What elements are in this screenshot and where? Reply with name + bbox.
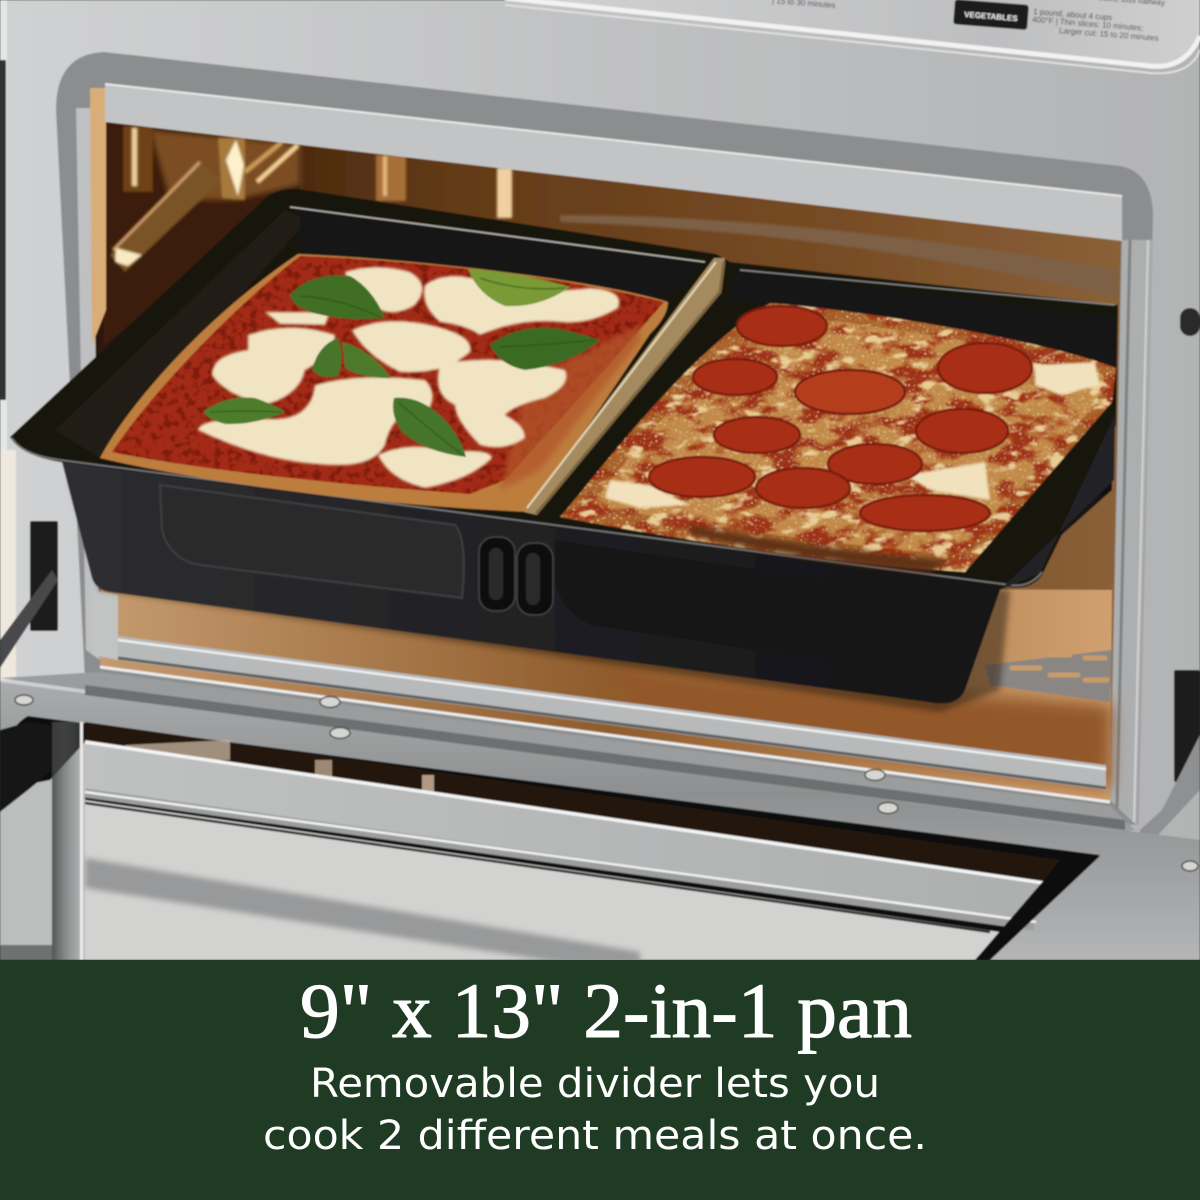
left edge background: [0, 0, 16, 680]
tomato sauce: [112, 256, 664, 494]
glass panel: [85, 742, 1044, 930]
mesh shadow band: [85, 858, 640, 975]
oven body: [0, 0, 1200, 960]
cheese highlights: [605, 362, 1100, 508]
right black border: [975, 856, 1100, 960]
right side: button and hinge slot: [1126, 308, 1200, 898]
door plate: [0, 682, 1200, 960]
2-in-1 pan: [10, 189, 1118, 712]
door window black border: [0, 716, 1100, 960]
sauce and cheese mottling: [550, 295, 1130, 580]
window reflections: [125, 740, 230, 760]
heating rack reflections: [110, 126, 1118, 298]
browned bottom edge: [690, 525, 950, 572]
glass verticals: [52, 722, 82, 960]
heading: 9" x 13" 2-in-1 pan: [300, 967, 912, 1054]
pepperoni slices: [649, 306, 1032, 531]
back rack: [985, 650, 1112, 702]
glass and lower panel left: [0, 742, 85, 960]
left wall: [104, 120, 300, 345]
sauce texture: [116, 256, 658, 494]
guide text: vegetables: 1 pound, about 4 cups: [1033, 7, 1112, 22]
subheading: [263, 1061, 927, 1159]
lower mesh panel: [85, 800, 1000, 960]
oven floor: [92, 585, 1112, 802]
pan divider: [524, 258, 725, 515]
inner left strip: [90, 88, 106, 345]
pan shadow: [70, 480, 1010, 712]
crust and base: [560, 303, 1116, 572]
mozzarella: [198, 267, 619, 488]
label: vegetables: VEGETABLES: [964, 10, 1019, 23]
top inner trim strip: [105, 84, 1122, 241]
label: vegetables: [953, 0, 1029, 30]
pan outer side: [62, 425, 1112, 703]
right pizza: pepperoni: [550, 295, 1130, 580]
oven door: [0, 667, 1200, 975]
right pan wall: [1000, 415, 1115, 590]
left pizza: margherita: [90, 250, 690, 520]
glass bar: [85, 793, 1034, 926]
guide text: vegetables: [772, 0, 1165, 43]
inner black handle: [0, 722, 50, 812]
guide text: vegetables: 400°F | Thin slices: 10 minutes;: [1032, 15, 1144, 33]
front rail: [118, 636, 1106, 790]
rim highlight front: [12, 438, 1042, 585]
subheading: cook 2 different meals at once.: [263, 1113, 927, 1159]
window interior: [85, 722, 1060, 880]
melted cheese base: [590, 315, 1105, 555]
pan inner left wall sheen: [55, 210, 308, 458]
basil leaves: [203, 269, 600, 457]
right side frame highlight: [1110, 240, 1152, 826]
oven door frame: [56, 52, 1153, 825]
oven interior: [90, 88, 1122, 802]
pan rim back and sides: [10, 189, 1118, 588]
front embossed panels: [160, 485, 464, 598]
subheading: Removable divider lets you: [310, 1061, 880, 1107]
left side frame: [76, 108, 100, 660]
left latch: [0, 521, 58, 668]
crust: [100, 254, 668, 512]
screws: [15, 695, 1198, 871]
bottom banner: [0, 960, 1200, 1200]
divider handles: [479, 537, 553, 615]
guide text: vegetables: Larger cut: 15 to 20 minutes: [1059, 26, 1159, 43]
control panel with cooking guide: [505, 0, 1200, 73]
